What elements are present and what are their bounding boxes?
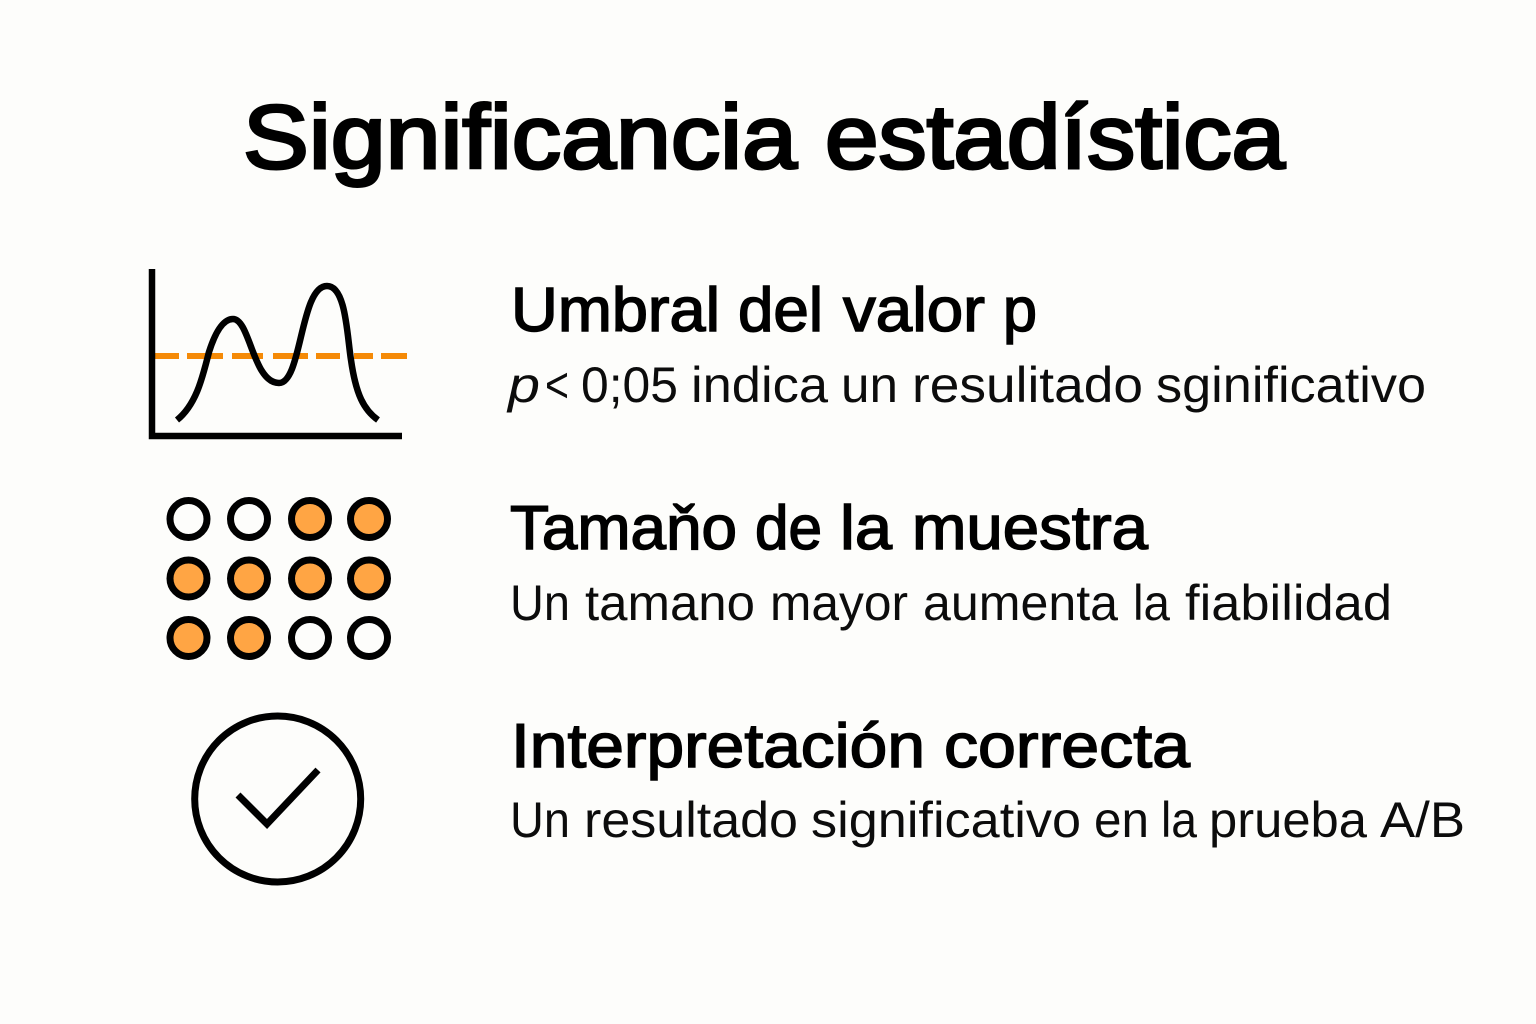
distribution curve xyxy=(177,286,378,420)
title: estadística xyxy=(825,88,1286,188)
text: p-value description: indica xyxy=(691,357,828,413)
title: Significancia xyxy=(243,88,798,188)
text: p-value description: resulitado xyxy=(912,357,1143,413)
text: interpretation description: resultado xyxy=(584,792,798,848)
heading: p-value threshold xyxy=(511,276,1037,345)
text: p-value description: un xyxy=(841,357,898,413)
heading: p-value threshold: del xyxy=(738,276,823,345)
text: interpretation description xyxy=(510,792,1465,848)
heading: sample size xyxy=(510,494,1149,563)
icon: sample dot grid xyxy=(170,500,388,656)
text: sample size description: tamano xyxy=(585,575,755,631)
text: p-value description: 0;05 xyxy=(581,357,678,413)
heading: sample size: muestra xyxy=(912,494,1149,563)
heading: correct interpretation xyxy=(511,712,1191,781)
heading: correct interpretation: correcta xyxy=(944,712,1191,781)
text: p-value description xyxy=(506,357,1426,413)
text: sample size description: aumenta xyxy=(923,575,1118,631)
text: p-value description: < xyxy=(545,357,569,413)
heading: sample size: la xyxy=(840,494,893,563)
heading: p-value threshold: valor xyxy=(843,276,985,345)
heading: correct interpretation: Interpretación xyxy=(511,712,925,781)
text: interpretation description: prueba xyxy=(1209,792,1367,848)
text: interpretation description: la xyxy=(1161,792,1197,848)
heading: sample size: Tamaňo xyxy=(510,494,737,563)
text: sample size description: Un xyxy=(510,575,570,631)
text: sample size description: mayor xyxy=(770,575,908,631)
icon: p-value distribution chart xyxy=(152,269,407,436)
text: interpretation description: en xyxy=(1094,792,1149,848)
text: sample size description: la xyxy=(1133,575,1170,631)
text: p-value description: p xyxy=(506,357,540,413)
text: interpretation description: significativo xyxy=(811,792,1081,848)
chart axes xyxy=(152,269,402,436)
text: sample size description: fiabilidad xyxy=(1185,575,1392,631)
heading: sample size: de xyxy=(755,494,822,563)
heading: p-value threshold: p xyxy=(1003,276,1037,345)
threshold dashed line xyxy=(155,353,407,359)
text: interpretation description: Un xyxy=(510,792,570,848)
text: p-value description: sginificativo xyxy=(1156,357,1426,413)
heading: p-value threshold: Umbral xyxy=(511,276,720,345)
icon: check mark in circle xyxy=(195,716,361,882)
title xyxy=(243,88,1286,188)
text: interpretation description: A/B xyxy=(1380,792,1465,848)
text: sample size description xyxy=(510,575,1392,631)
